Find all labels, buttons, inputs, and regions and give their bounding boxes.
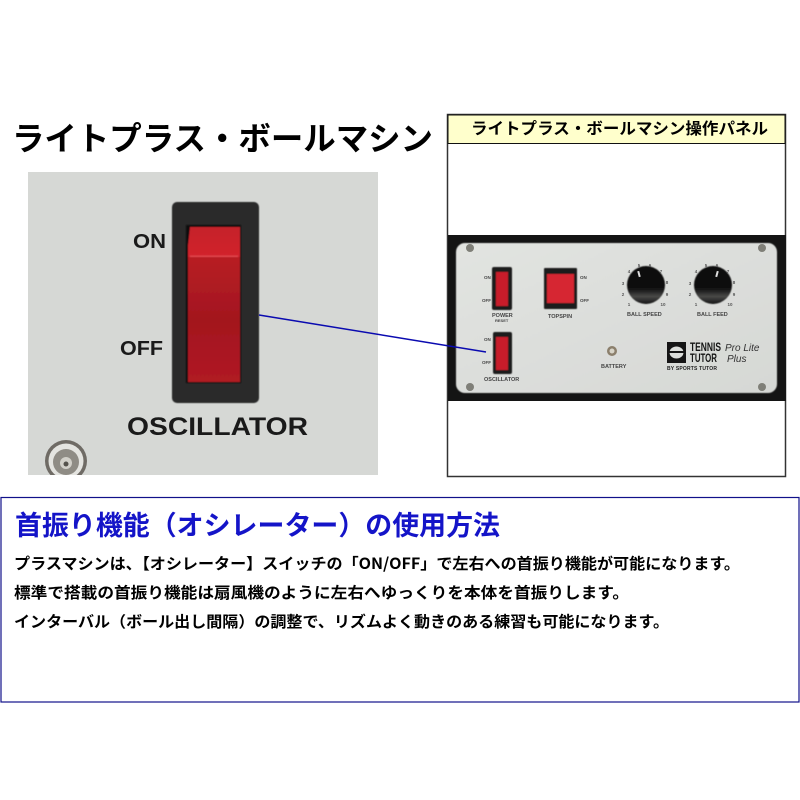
battery indicator (607, 346, 617, 356)
screw jack (45, 440, 87, 475)
knob: ball feed: 9 (733, 292, 736, 297)
logo: tennis tutor: TUTOR (690, 351, 717, 365)
knob: ball speed: 9 (666, 292, 669, 297)
panel: usage description (1, 498, 799, 702)
title: ライトプラス・ボールマシン (12, 113, 433, 160)
small labels: BALL FEED (697, 312, 728, 318)
knob: ball feed: 5 (705, 263, 708, 268)
small labels: TOPSPIN (548, 314, 572, 320)
small labels: POWER (492, 313, 513, 319)
small labels: BALL SPEED (627, 312, 662, 318)
panel: control panel frame (448, 114, 786, 476)
small labels: OFF (482, 360, 491, 365)
switch housing (172, 202, 259, 403)
logo: tennis tutor: Plus (727, 354, 746, 365)
knob: ball feed: 7 (727, 269, 730, 274)
knob: ball feed: 1 (695, 302, 698, 307)
photo: oscillator switch close-up: OSCILLATOR (127, 413, 308, 441)
control panel photo (448, 235, 786, 401)
knob: ball speed: 10 (660, 302, 666, 307)
knob: ball feed: 2 (689, 292, 692, 297)
knob: ball speed: 7 (660, 269, 663, 274)
knob: ball feed: 8 (733, 280, 736, 285)
knob: ball speed (622, 263, 669, 307)
logo: tennis tutor: BY SPORTS TUTOR (667, 366, 717, 372)
small labels: OFF (580, 298, 589, 303)
knob: ball feed (689, 263, 736, 307)
switch labels: ON (133, 231, 166, 253)
topspin switch (544, 268, 577, 309)
small labels: ON (484, 275, 491, 280)
small labels: OSCILLATOR (484, 377, 519, 383)
knob: ball feed: 3 (689, 281, 692, 286)
oscillator switch (493, 332, 512, 374)
small labels (482, 275, 728, 383)
knob: ball speed: 5 (638, 263, 641, 268)
red rocker (186, 225, 241, 383)
screws (466, 244, 766, 391)
usage text: インターバル（ボール出し間隔）の調整で、リズムよく動きのある練習も可能になります。 (14, 610, 669, 632)
knob: ball speed: 4 (628, 269, 631, 274)
knob: ball feed: 6 (716, 263, 719, 268)
knob: ball speed: 2 (622, 292, 625, 297)
small labels: ON (580, 275, 587, 280)
usage text (14, 552, 740, 632)
knob: ball speed: 1 (628, 302, 631, 307)
knob: ball speed: 3 (622, 281, 625, 286)
photo: oscillator switch close-up: OFF (120, 338, 163, 360)
power switch (492, 267, 512, 310)
knob: ball feed: 10 (727, 302, 733, 307)
small labels: OFF (482, 298, 491, 303)
usage text: プラスマシンは、【オシレーター】スイッチの「ON/OFF」で左右への首振り機能が可能になります。 (14, 552, 740, 574)
small labels: ON (484, 337, 491, 342)
usage heading: 首振り機能（オシレーター）の使用方法 (15, 504, 500, 543)
small labels: RESET (495, 318, 509, 323)
knob: ball speed: 6 (649, 263, 652, 268)
logo: tennis tutor (667, 340, 760, 372)
photo: oscillator switch close-up (28, 172, 378, 482)
small labels: BATTERY (601, 364, 627, 370)
usage text: 標準で搭載の首振り機能は扇風機のように左右へゆっくりを本体を首振りします。 (14, 581, 629, 603)
logo: tennis tutor: TENNIS (690, 340, 721, 354)
logo: tennis tutor: Pro Lite (725, 343, 760, 354)
knob: ball speed: 8 (666, 280, 669, 285)
panel header: ライトプラス・ボールマシン操作パネル (471, 115, 768, 139)
knob: ball feed: 4 (695, 269, 698, 274)
connector line (259, 315, 486, 352)
